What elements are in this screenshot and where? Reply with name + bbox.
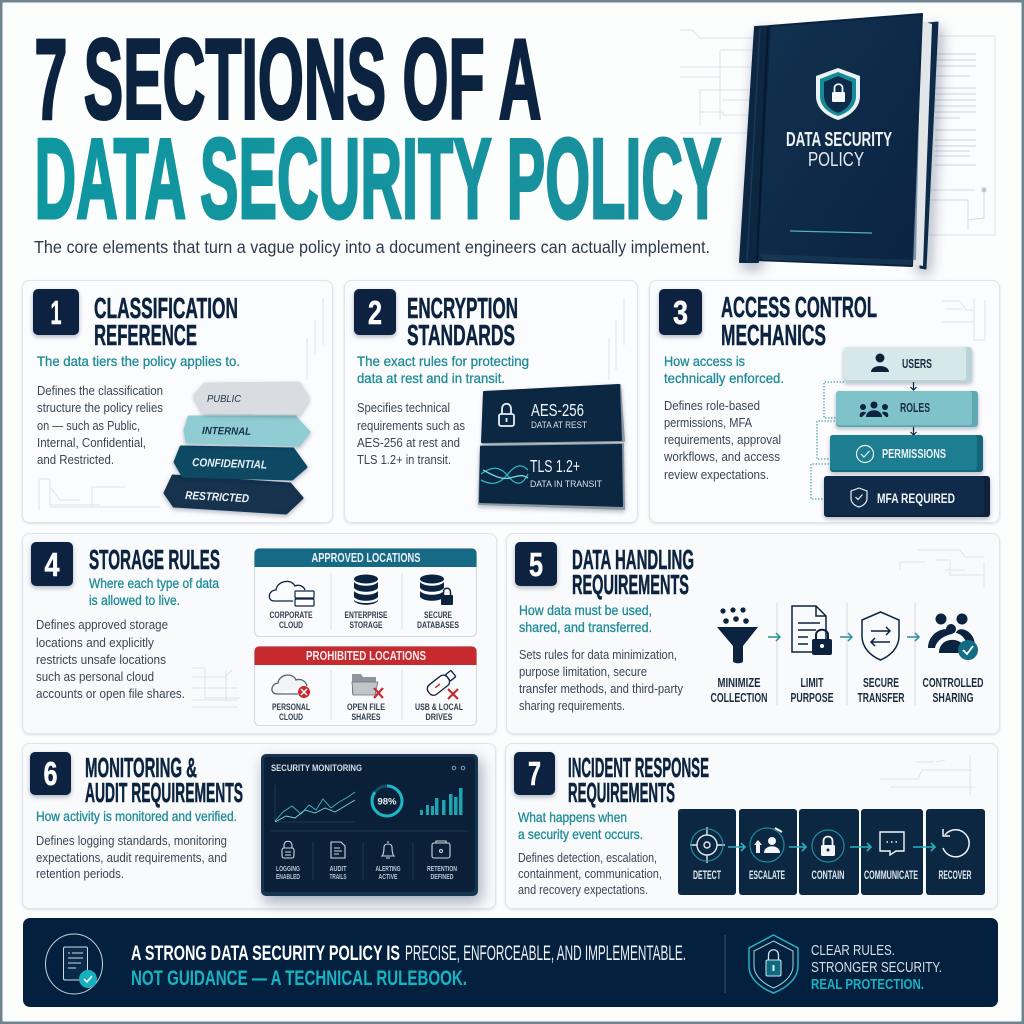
body text 1: [37, 383, 163, 467]
tier: public: PUBLIC: [207, 393, 241, 405]
heading 5: REQUIREMENTS: [572, 569, 689, 600]
dashboard status icons: [282, 841, 450, 858]
body text 7: Defines detection, escalation,: [518, 850, 657, 865]
tier: confidential: CONFIDENTIAL: [192, 457, 267, 472]
flow labels: COLLECTION: [710, 691, 768, 705]
bottom banner: [23, 918, 998, 1007]
number badge 5: [515, 542, 557, 586]
book front cover: [757, 14, 922, 266]
card: escalate: [739, 809, 797, 895]
book shield icon: [816, 68, 860, 120]
box: users: [844, 347, 972, 382]
body text 1: structure the policy relies: [37, 400, 163, 415]
body text 5: [519, 647, 683, 713]
subheading 5: How data must be used,: [519, 602, 652, 618]
body text 2: AES-256 at rest and: [357, 435, 460, 450]
number badge 6: 6: [44, 755, 58, 792]
panel 6: monitoring and audit requirements: [22, 744, 496, 908]
box: users: USERS: [902, 357, 932, 371]
number badge 6: [30, 752, 71, 795]
number badge 2: [354, 289, 396, 335]
box: roles: ROLES: [900, 401, 930, 415]
number badge 7: [514, 752, 555, 795]
dashboard status labels: ENABLED: [276, 874, 300, 881]
subheading 3: technically enforced.: [664, 370, 784, 386]
box: roles: [836, 391, 978, 427]
banner tagline: REAL PROTECTION.: [811, 977, 924, 993]
subtitle: The core elements that turn a vague policy into a document engineers can actually implement.: [34, 237, 710, 257]
dashboard status labels: AUDIT: [330, 866, 347, 873]
dashboard status labels: ACTIVE: [378, 874, 398, 881]
body text 1: on — such as Public,: [37, 418, 140, 433]
circuit background decoration: [680, 30, 755, 133]
body text 5: sharing requirements.: [519, 698, 625, 713]
panel 4: storage rules: [22, 534, 496, 734]
approved locations table: APPROVED LOCATIONS: [312, 551, 420, 565]
arrow: [907, 633, 919, 641]
prohibited locations table: [254, 646, 476, 726]
tier: confidential: [175, 447, 306, 479]
icon: personal cloud: [272, 675, 310, 698]
body text 1: Defines the classification: [37, 383, 163, 398]
body text 7: containment, communication,: [518, 866, 662, 881]
subheading 4: is allowed to live.: [89, 592, 180, 608]
heading 2: ENCRYPTION: [407, 293, 518, 325]
heading 4: STORAGE RULES: [89, 544, 220, 575]
TLS card: DATA IN TRANSIT: [530, 479, 602, 490]
body text 4: restricts unsafe locations: [36, 652, 166, 667]
approved labels: DATABASES: [417, 620, 459, 631]
number badge 3: [659, 289, 702, 335]
card: contain: CONTAIN: [812, 868, 844, 882]
access flow connectors: [811, 382, 916, 499]
approved locations table: [254, 548, 476, 636]
subheading 5: shared, and transferred.: [519, 619, 652, 635]
data handling flow: [710, 603, 984, 705]
box: permissions: PERMISSIONS: [882, 447, 946, 461]
prohibited labels: SHARES: [352, 712, 380, 723]
body text 4: accounts or open file shares.: [36, 686, 185, 701]
donut gauge: 98%: [377, 796, 397, 808]
number badge 1: 1: [50, 294, 62, 331]
dashboard status labels: RETENTION: [427, 866, 457, 873]
flow labels: [710, 676, 984, 705]
body text 4: [36, 617, 185, 701]
book title: POLICY: [808, 149, 864, 171]
prohibited labels: [272, 702, 463, 723]
body text 5: Sets rules for data minimization,: [519, 647, 677, 662]
prohibited labels: PERSONAL: [272, 702, 310, 713]
body text 6: Defines logging standards, monitoring: [36, 833, 227, 848]
icon: enterprise storage: [354, 574, 378, 605]
approved labels: [270, 610, 459, 631]
number badge 4: 4: [44, 546, 60, 583]
icon: open file shares: [352, 674, 383, 698]
panel 7: incident response requirements: INCIDENT RESPONSE: [568, 752, 709, 783]
subheading 2: data at rest and in transit.: [357, 370, 505, 386]
icon: retention box: [432, 841, 450, 858]
icon: people controlled: [928, 614, 978, 660]
TLS card: TLS 1.2+: [530, 456, 580, 476]
icon: bell: [382, 841, 394, 858]
icon: shield lock: [749, 935, 798, 993]
prohibited locations table: PROHIBITED LOCATIONS: [306, 648, 426, 663]
number badge 4: [31, 542, 73, 586]
tier: internal: INTERNAL: [202, 425, 251, 438]
panel 3: access control mechanics: [650, 280, 1000, 522]
body text 6: expectations, audit requirements, and: [36, 850, 227, 865]
heading 1: [94, 293, 238, 352]
number badge 7: 7: [528, 755, 541, 792]
process arrows: [728, 843, 935, 851]
body text 1: and Restricted.: [37, 452, 114, 467]
body text 5: transfer methods, and third-party: [519, 681, 683, 696]
icon: corporate cloud: [269, 581, 314, 606]
tier: internal: [185, 417, 309, 445]
AES-256 card: DATA AT REST: [531, 420, 587, 431]
dashboard status labels: TRAILS: [330, 874, 347, 881]
panel 2: encryption standards: [344, 280, 638, 522]
icon: document lock: [792, 606, 832, 655]
subheading 4: Where each type of data: [89, 575, 219, 591]
subheading 4: [89, 575, 219, 608]
heading 2: [407, 293, 518, 352]
subheading 3: [664, 353, 784, 386]
body text 2: TLS 1.2+ in transit.: [357, 452, 451, 467]
icon: verified document: [46, 934, 102, 994]
subheading 2: The exact rules for protecting: [357, 353, 529, 369]
banner message: NOT GUIDANCE — A TECHNICAL RULEBOOK.: [131, 967, 467, 990]
arrow: [768, 633, 780, 641]
icon: logging lock: [282, 841, 294, 858]
box: MFA required: MFA REQUIRED: [877, 491, 955, 506]
icon: shield transfer: [862, 612, 899, 660]
tier: restricted: RESTRICTED: [185, 490, 249, 505]
flow labels: SECURE: [863, 676, 899, 690]
dashboard status labels: ALERTING: [376, 866, 401, 873]
heading 7: REQUIREMENTS: [568, 777, 675, 808]
subheading 1: The data tiers the policy applies to.: [37, 353, 240, 369]
heading 1: CLASSIFICATION: [94, 293, 238, 325]
body text 2: [357, 400, 465, 467]
icon: secure databases: [420, 574, 453, 605]
flow labels: CONTROLLED: [922, 676, 984, 690]
box: permissions: [830, 435, 983, 472]
book back cover and pages: [740, 21, 938, 269]
card: detect: [678, 809, 736, 895]
body text 3: permissions, MFA: [664, 415, 752, 430]
body text 7: and recovery expectations.: [518, 882, 648, 897]
donut gauge: [372, 786, 402, 816]
body text 6: retention periods.: [36, 866, 124, 881]
panel 7: incident response requirements: [506, 744, 998, 908]
heading 5: DATA HANDLING: [572, 544, 694, 575]
prohibited labels: USB & LOCAL: [415, 702, 463, 713]
wave icon: [481, 466, 528, 483]
card: contain: [799, 809, 859, 895]
number badge 1: [33, 289, 79, 335]
dashboard status labels: DEFINED: [430, 874, 454, 881]
body text 3: [663, 398, 781, 482]
subheading 6: How activity is monitored and verified.: [36, 808, 237, 824]
subheading 5: [519, 602, 652, 635]
icon: audit document: [331, 842, 345, 858]
dashboard status labels: [276, 866, 457, 881]
subheading 7: [518, 809, 643, 842]
flow labels: TRANSFER: [858, 691, 904, 705]
banner tagline: [811, 943, 942, 993]
dashboard status labels: LOGGING: [276, 866, 300, 873]
body text 1: Internal, Confidential,: [37, 435, 146, 450]
icon: funnel: [717, 607, 758, 663]
flow labels: LIMIT: [800, 676, 824, 690]
body text 3: Defines role-based: [664, 398, 760, 413]
heading 5: [572, 544, 694, 600]
TLS card: [479, 444, 624, 509]
classification tier stack: [165, 383, 309, 513]
body text 5: purpose limitation, secure: [519, 664, 647, 679]
subheading 3: How access is: [664, 353, 745, 369]
heading 3: ACCESS CONTROL: [721, 292, 877, 324]
body text 3: review expectations.: [664, 467, 769, 482]
approved labels: STORAGE: [350, 620, 382, 631]
card: detect: DETECT: [693, 868, 721, 882]
body text 4: locations and explicitly: [36, 635, 154, 650]
banner message: [131, 942, 686, 990]
arrow: [840, 633, 852, 641]
body text 4: Defines approved storage: [36, 617, 168, 632]
card: recover: [926, 809, 985, 895]
body text 7: [518, 850, 662, 897]
card: communicate: [861, 809, 923, 895]
subheading 7: a security event occurs.: [518, 826, 643, 842]
approved labels: CORPORATE: [270, 610, 312, 621]
banner message: PRECISE, ENFORCEABLE, AND IMPLEMENTABLE.: [405, 942, 686, 965]
icon: USB drive: [425, 669, 458, 699]
panel 1: classification reference: [22, 280, 332, 522]
line chart: [275, 785, 355, 822]
card: recover: RECOVER: [938, 868, 972, 882]
AES-256 card: AES-256: [531, 400, 584, 420]
flow labels: PURPOSE: [790, 691, 834, 705]
prohibited labels: DRIVES: [426, 712, 452, 723]
heading 6: AUDIT REQUIREMENTS: [85, 777, 243, 808]
tier: public: [195, 383, 308, 413]
heading 3: [721, 292, 877, 352]
number badge 5: 5: [529, 546, 543, 583]
approved labels: SECURE: [424, 610, 452, 621]
heading 3: MECHANICS: [721, 320, 826, 352]
banner message: A STRONG DATA SECURITY POLICY IS: [131, 942, 400, 965]
flow labels: MINIMIZE: [718, 676, 760, 690]
card: communicate: COMMUNICATE: [864, 868, 918, 882]
body text 3: requirements, approval: [664, 432, 781, 447]
lock icon: [499, 404, 514, 426]
prohibited labels: OPEN FILE: [347, 702, 385, 713]
AES-256 card: [482, 385, 624, 443]
heading 2: STANDARDS: [407, 320, 515, 352]
body text 4: such as personal cloud: [36, 669, 154, 684]
prohibited labels: CLOUD: [279, 712, 303, 723]
banner tagline: STRONGER SECURITY.: [811, 960, 942, 976]
heading 1: REFERENCE: [94, 320, 197, 352]
book title: [786, 129, 892, 171]
card: escalate: ESCALATE: [749, 868, 785, 882]
title: 7 SECTIONS OF A: [34, 16, 542, 144]
number badge 2: 2: [368, 294, 382, 331]
heading 6: MONITORING &: [85, 752, 197, 783]
security monitoring dashboard: SECURITY MONITORING: [271, 763, 362, 773]
bar chart: [420, 788, 462, 815]
box: MFA required: [824, 476, 990, 517]
subheading 2: [357, 353, 529, 386]
body text 6: [36, 833, 227, 881]
approved labels: ENTERPRISE: [344, 610, 388, 621]
book: data security policy: [740, 14, 938, 269]
book title: DATA SECURITY: [786, 129, 892, 151]
heading 7: [568, 752, 709, 808]
number badge 3: 3: [673, 294, 688, 331]
tier: restricted: [165, 476, 302, 513]
subheading 7: What happens when: [518, 809, 627, 825]
title: [34, 16, 722, 243]
body text 3: workflows, and access: [663, 449, 780, 464]
flow labels: SHARING: [932, 691, 974, 705]
security monitoring dashboard: [261, 754, 478, 896]
background document sheet: [925, 36, 995, 235]
body text 2: Specifies technical: [357, 400, 450, 415]
heading 6: [85, 752, 243, 808]
panel 5: data handling requirements: [506, 534, 1000, 734]
banner tagline: CLEAR RULES.: [811, 943, 895, 959]
body text 2: requirements such as: [357, 418, 465, 433]
incident response cards: [678, 809, 985, 895]
approved labels: CLOUD: [279, 620, 303, 631]
